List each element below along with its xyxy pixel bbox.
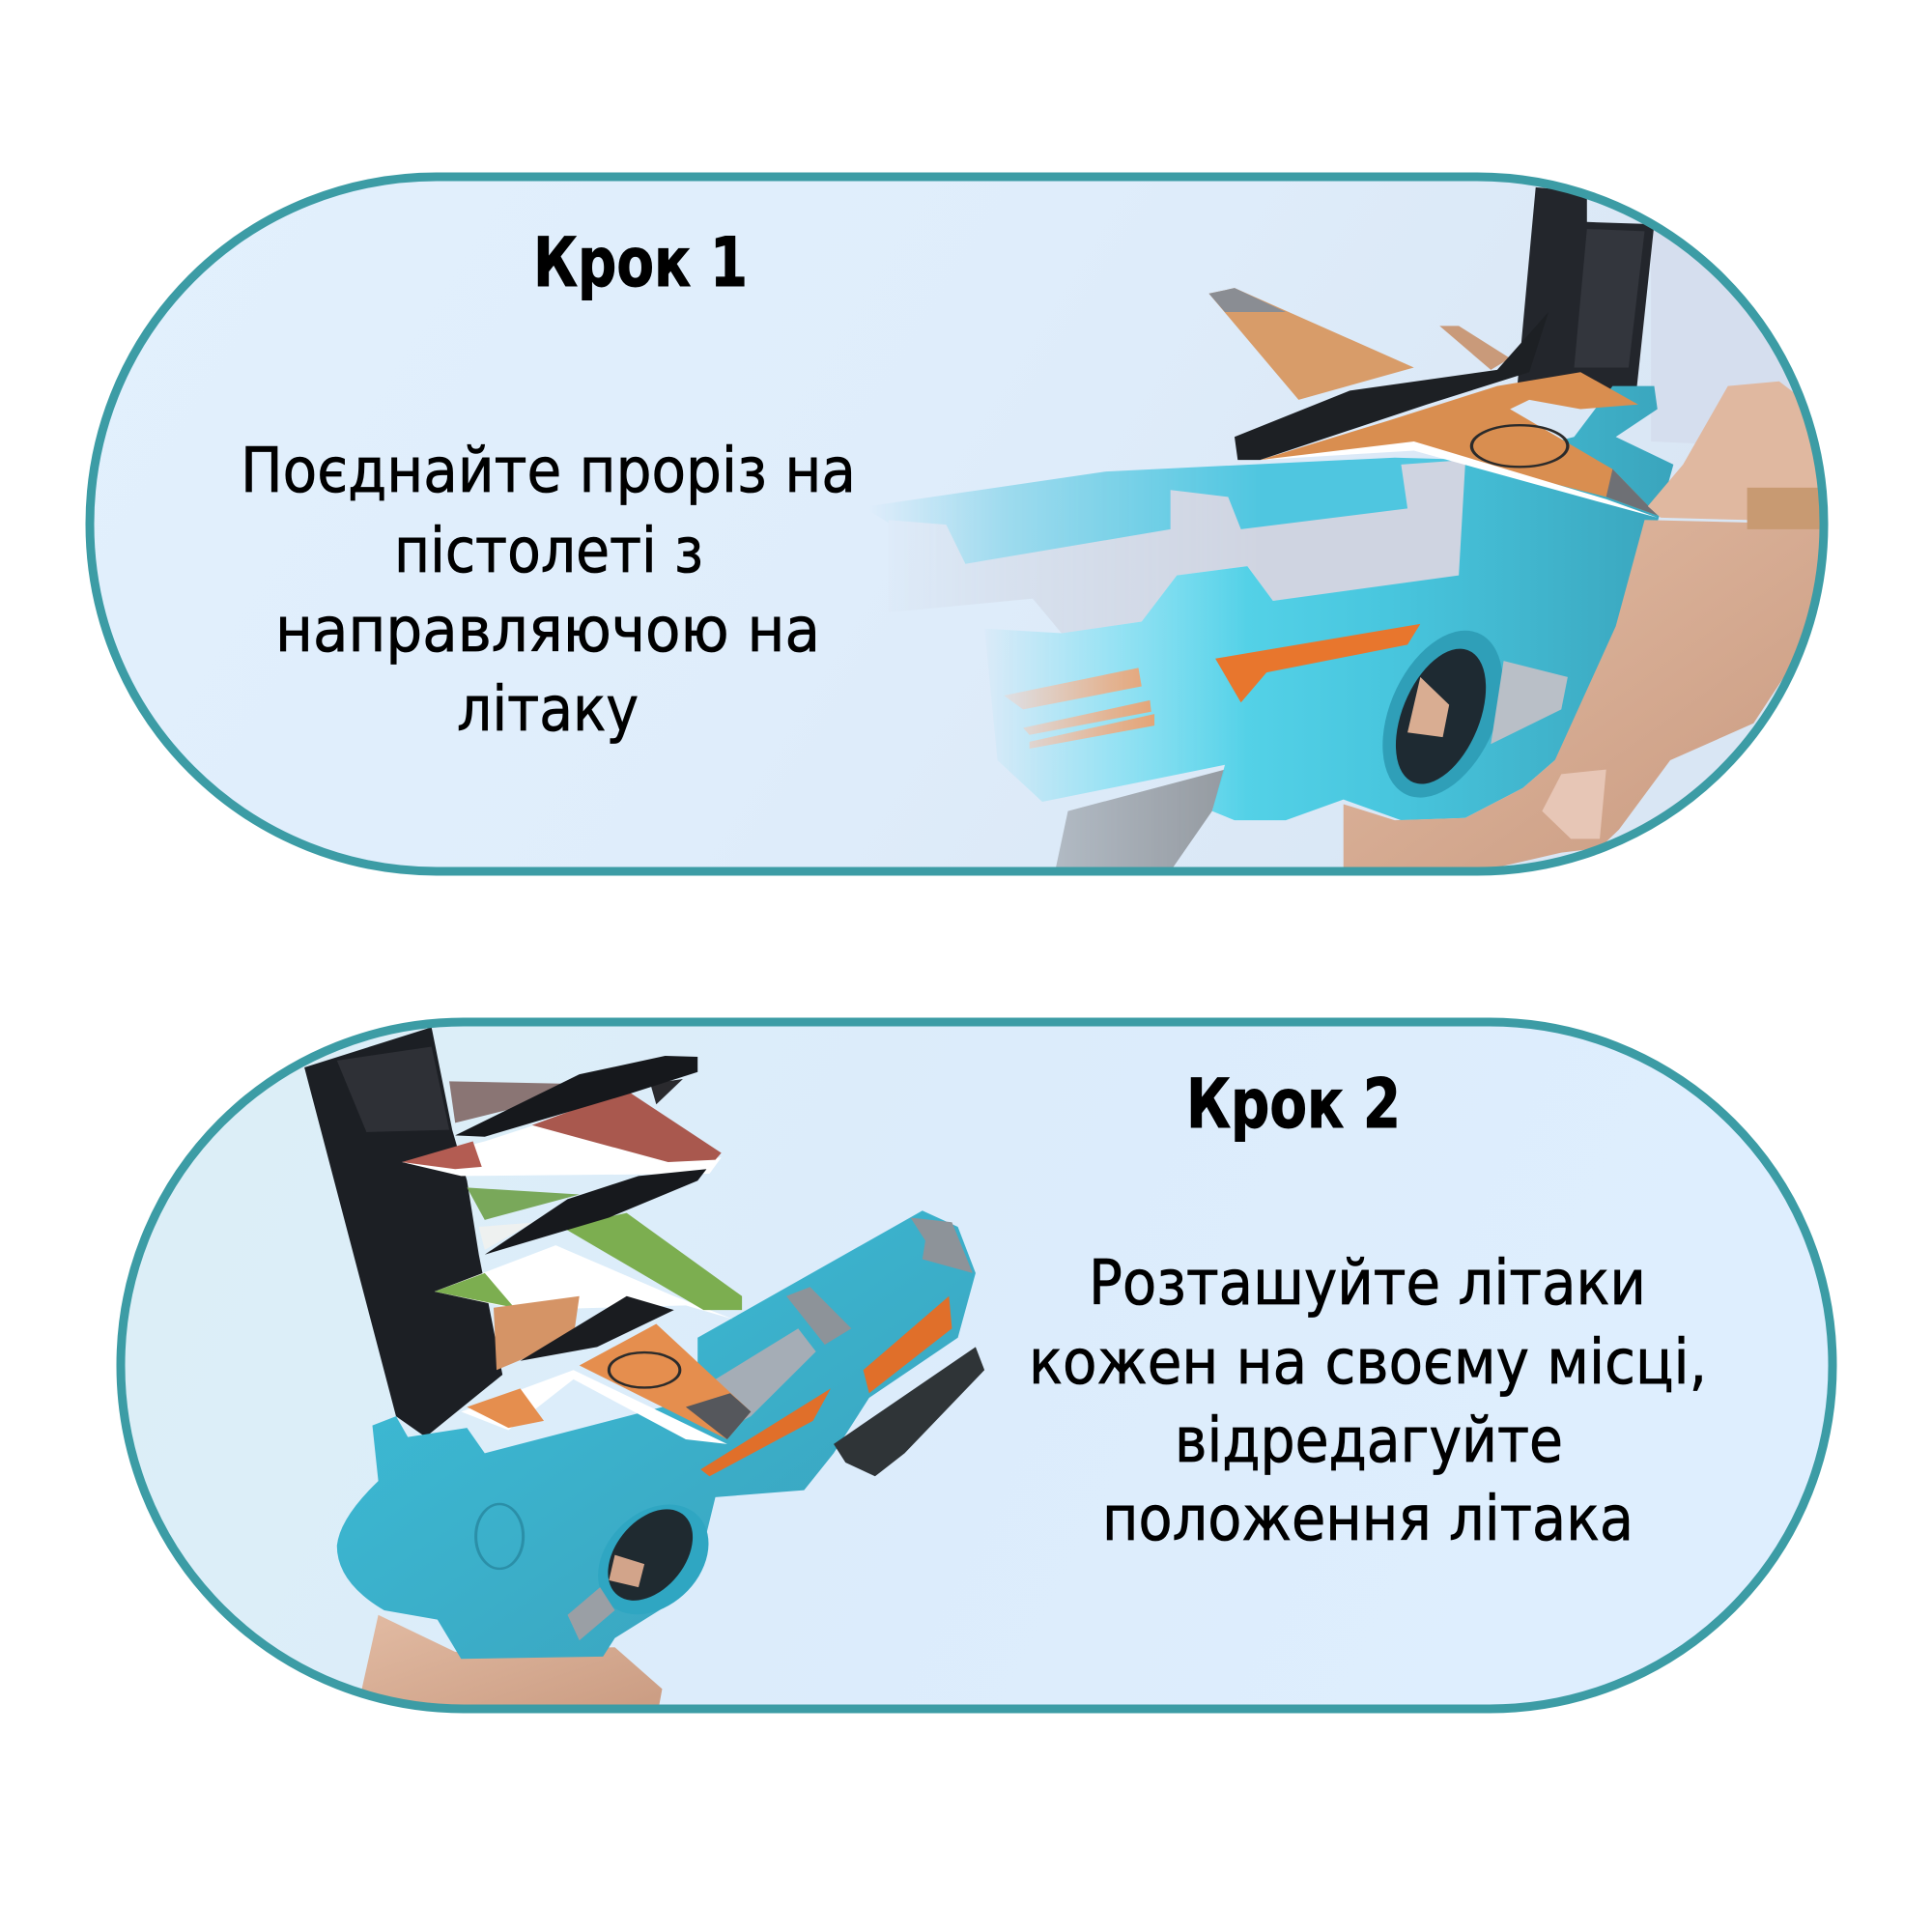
text block: step 1 instructions: Поєднайте проріз на xyxy=(241,436,856,507)
orange stripes xyxy=(700,1296,952,1476)
heading: Крок 1: Крок 1 xyxy=(533,223,748,302)
text block: step 2 instructions: відредагуйте xyxy=(1175,1406,1563,1477)
round emblem xyxy=(476,1504,524,1569)
gun body xyxy=(337,1210,976,1659)
text block: step 1 instructions: направляючою на xyxy=(275,595,820,667)
grip opening xyxy=(1382,630,1502,798)
heading: Крок 2: Крок 2 xyxy=(1186,1065,1401,1144)
text block: step 1 instructions: пістолеті з xyxy=(394,516,703,587)
fingers over gun xyxy=(1648,382,1833,520)
plane 2 green xyxy=(467,1187,580,1220)
text block: step 1 instructions xyxy=(241,436,856,746)
illustration: toy launcher loaded with three planes xyxy=(304,1027,984,1721)
plane xyxy=(1208,288,1658,518)
black trigger xyxy=(834,1347,984,1476)
plane 3 orange xyxy=(494,1296,580,1370)
hand: palm and lower fingers xyxy=(1344,520,1833,868)
text block: step 2 instructions xyxy=(1029,1248,1707,1555)
icon: orange stripe xyxy=(1215,624,1420,702)
text block: step 1 instructions: літаку xyxy=(457,674,639,746)
grip hole xyxy=(598,1505,709,1614)
dark tower xyxy=(304,1027,502,1437)
panel: step 2 xyxy=(121,1022,1833,1721)
plane 1 red xyxy=(449,1081,561,1122)
hand holding grip xyxy=(361,1615,663,1704)
text block: step 2 instructions: кожен на своєму місці, xyxy=(1029,1327,1707,1399)
illustration: toy launcher with plane held in hand xyxy=(863,187,1855,871)
window on grip xyxy=(1491,661,1568,744)
text block: step 2 instructions: Розташуйте літаки xyxy=(1089,1248,1646,1320)
panel: step 1 xyxy=(90,177,1855,871)
text block: step 2 instructions: положення літака xyxy=(1102,1484,1634,1555)
